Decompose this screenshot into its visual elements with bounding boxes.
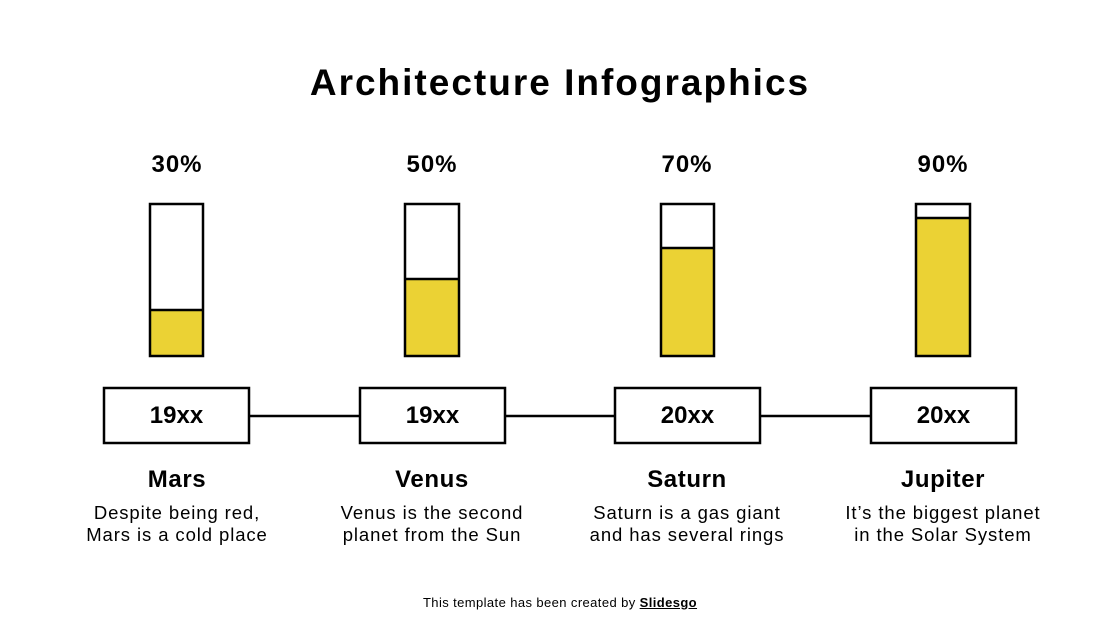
title: Architecture Infographics [310, 62, 810, 103]
timeline connectors [250, 415, 870, 417]
item: Saturn: Saturn [647, 466, 727, 493]
item: Mars: Despite being red, [94, 502, 260, 523]
bar: Saturn 70% [661, 204, 714, 356]
item: Mars: Mars is a cold place [86, 524, 268, 545]
year boxes [104, 388, 1016, 443]
bar: Venus 50% [405, 204, 459, 356]
percentages [151, 151, 969, 178]
text: 19xx [406, 402, 459, 429]
item: Mars: Mars [148, 466, 206, 493]
item: Jupiter: in the Solar System [854, 524, 1032, 545]
text: 30% [151, 151, 203, 178]
footer credit: This template has been created by Slidesgo [423, 595, 697, 610]
item: Jupiter: It’s the biggest planet [845, 502, 1041, 523]
item: Venus [340, 466, 523, 545]
text: 20xx [917, 402, 970, 429]
item: Saturn: and has several rings [590, 524, 784, 545]
item: Venus: Venus is the second [341, 502, 523, 523]
item: Jupiter: Jupiter [901, 466, 985, 493]
text: 20xx [661, 402, 714, 429]
text: 70% [661, 151, 713, 178]
bar: Jupiter 90% [916, 204, 970, 356]
item: Venus: planet from the Sun [343, 524, 521, 545]
text: 19xx [150, 402, 203, 429]
item: Venus: Venus [395, 466, 469, 493]
item: Mars [86, 466, 268, 545]
text: 50% [406, 151, 458, 178]
item: Saturn: Saturn is a gas giant [593, 502, 781, 523]
item: Saturn [590, 466, 784, 545]
item: Jupiter [845, 466, 1041, 545]
year labels [150, 402, 970, 429]
bar: Mars 30% [150, 204, 203, 356]
text: 90% [917, 151, 969, 178]
